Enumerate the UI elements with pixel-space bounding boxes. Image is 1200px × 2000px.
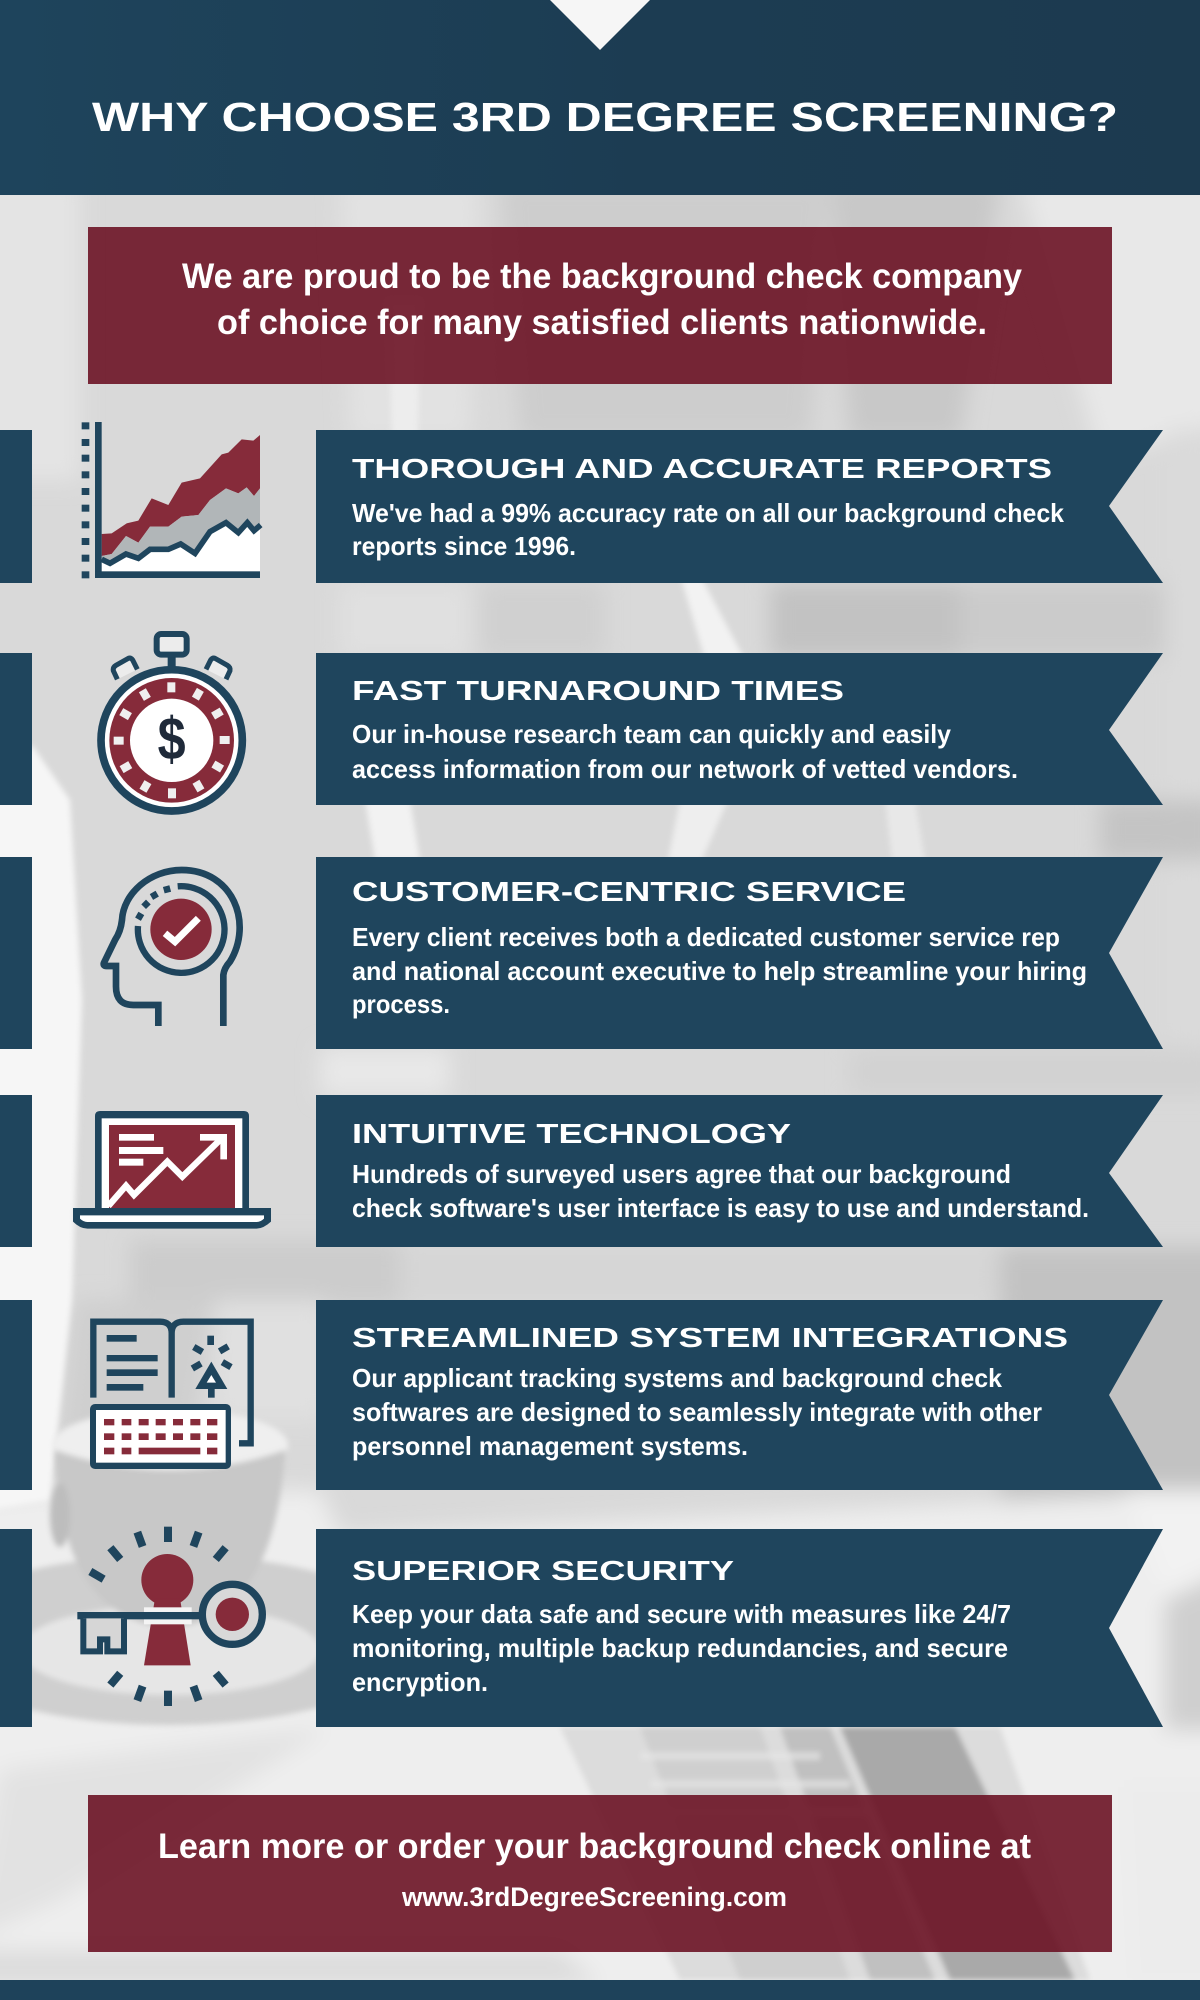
icon: area chart	[82, 422, 261, 578]
row 6 left stub	[0, 1529, 32, 1727]
call to action text: Learn more or order your background check online at	[158, 1827, 1031, 1866]
body line 1: Hundreds of surveyed users agree that our background	[352, 1159, 1011, 1189]
header notch triangle	[550, 0, 650, 50]
ribbon 2	[316, 653, 1163, 805]
body line 2: reports since 1996.	[352, 531, 576, 561]
body line 3: personnel management systems.	[352, 1431, 748, 1461]
intro text line 2: of choice for many satisfied clients nationwide.	[217, 303, 987, 342]
ribbon 5	[316, 1300, 1163, 1490]
body line 2: monitoring, multiple backup redundancies, and secure	[352, 1633, 1008, 1663]
white sleeve and creases	[0, 300, 925, 1510]
call to action panel	[88, 1795, 1112, 1952]
ribbon 3	[316, 857, 1163, 1049]
body line 2: and national account executive to help streamline your hiring	[352, 956, 1087, 986]
body line 2: softwares are designed to seamlessly integrate with other	[352, 1397, 1042, 1427]
heading: CUSTOMER-CENTRIC SERVICE	[352, 876, 906, 907]
row 1 left stub	[0, 430, 32, 583]
heading: THOROUGH AND ACCURATE REPORTS	[352, 453, 1052, 484]
icon: laptop	[73, 1111, 271, 1229]
row 2 left stub	[0, 653, 32, 805]
title: WHY CHOOSE 3RD DEGREE SCREENING?	[92, 94, 1118, 140]
icon: key and keyhole	[77, 1527, 262, 1706]
body line 1: Our applicant tracking systems and background check	[352, 1363, 1003, 1393]
icon: head with check	[104, 870, 240, 1026]
row 4 left stub	[0, 1095, 32, 1247]
ribbon 6	[316, 1529, 1163, 1727]
ribbon 1	[316, 430, 1163, 583]
body line 1: We've had a 99% accuracy rate on all our background check	[352, 498, 1065, 528]
intro panel	[88, 227, 1112, 384]
website url: www.3rdDegreeScreening.com	[401, 1882, 787, 1912]
body line 2: check software's user interface is easy to use and understand.	[352, 1193, 1089, 1223]
header band	[0, 0, 1200, 195]
heading: FAST TURNAROUND TIMES	[352, 675, 844, 706]
cup and saucer	[0, 1409, 415, 1725]
icon: stopwatch: $	[158, 705, 186, 772]
heading: STREAMLINED SYSTEM INTEGRATIONS	[352, 1322, 1068, 1353]
icon: stopwatch	[101, 634, 242, 811]
body line 3: process.	[352, 989, 450, 1019]
body line 1: Our in-house research team can quickly and easily	[352, 719, 952, 749]
icon: book and keyboard	[90, 1322, 251, 1469]
heading: INTUITIVE TECHNOLOGY	[352, 1118, 791, 1149]
body line 1: Every client receives both a dedicated customer service rep	[352, 922, 1060, 952]
ribbon 4	[316, 1095, 1163, 1247]
row 3 left stub	[0, 857, 32, 1049]
body line 2: access information from our network of vetted vendors.	[352, 754, 1018, 784]
body line 1: Keep your data safe and secure with measures like 24/7	[352, 1599, 1011, 1629]
footer band	[0, 1980, 1200, 2000]
laptop keyboard	[560, 1727, 1090, 1980]
body line 3: encryption.	[352, 1667, 488, 1697]
heading: SUPERIOR SECURITY	[352, 1555, 734, 1586]
intro text line 1: We are proud to be the background check company	[182, 257, 1023, 296]
row 5 left stub	[0, 1300, 32, 1490]
